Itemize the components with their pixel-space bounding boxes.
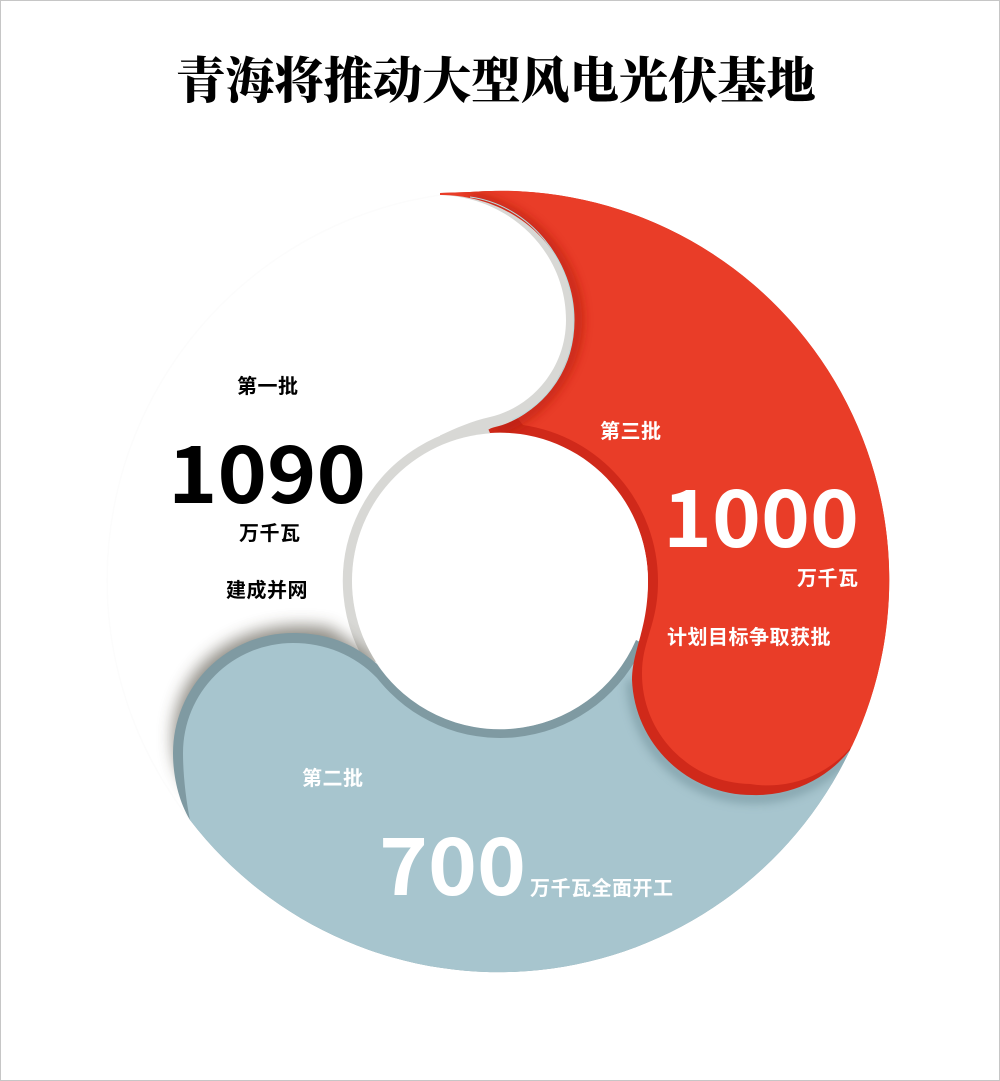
label: second batch: 第二批 bbox=[302, 767, 364, 790]
label: third batch: 第三批 bbox=[600, 420, 662, 443]
first batch rim arc bbox=[348, 429, 490, 664]
label: third batch: 计划目标争取获批 bbox=[667, 626, 831, 649]
label: third batch: 1000 bbox=[663, 459, 859, 570]
segment: third batch red bbox=[440, 191, 889, 795]
label: first batch bbox=[168, 375, 366, 602]
label: first batch: 1090 bbox=[168, 415, 366, 526]
segment: second batch blue bbox=[173, 626, 850, 972]
segment: first batch white lobe with grey rim bbox=[352, 195, 648, 729]
label: third batch: 万千瓦 bbox=[797, 567, 858, 590]
label: first batch: 万千瓦 bbox=[239, 522, 300, 545]
segment: first batch white disc edge bbox=[107, 195, 440, 820]
label: second batch bbox=[302, 767, 674, 918]
donut chart bbox=[107, 191, 889, 972]
label: third batch bbox=[600, 420, 859, 649]
centre hole bbox=[352, 433, 648, 729]
label: first batch: 建成并网 bbox=[226, 578, 308, 602]
label: first batch: 第一批 bbox=[237, 375, 298, 398]
label: second batch: 万千瓦全面开工 bbox=[530, 876, 674, 900]
label: second batch: 700 bbox=[379, 807, 526, 918]
title: 青海将推动大型风电光伏基地 bbox=[176, 42, 816, 113]
